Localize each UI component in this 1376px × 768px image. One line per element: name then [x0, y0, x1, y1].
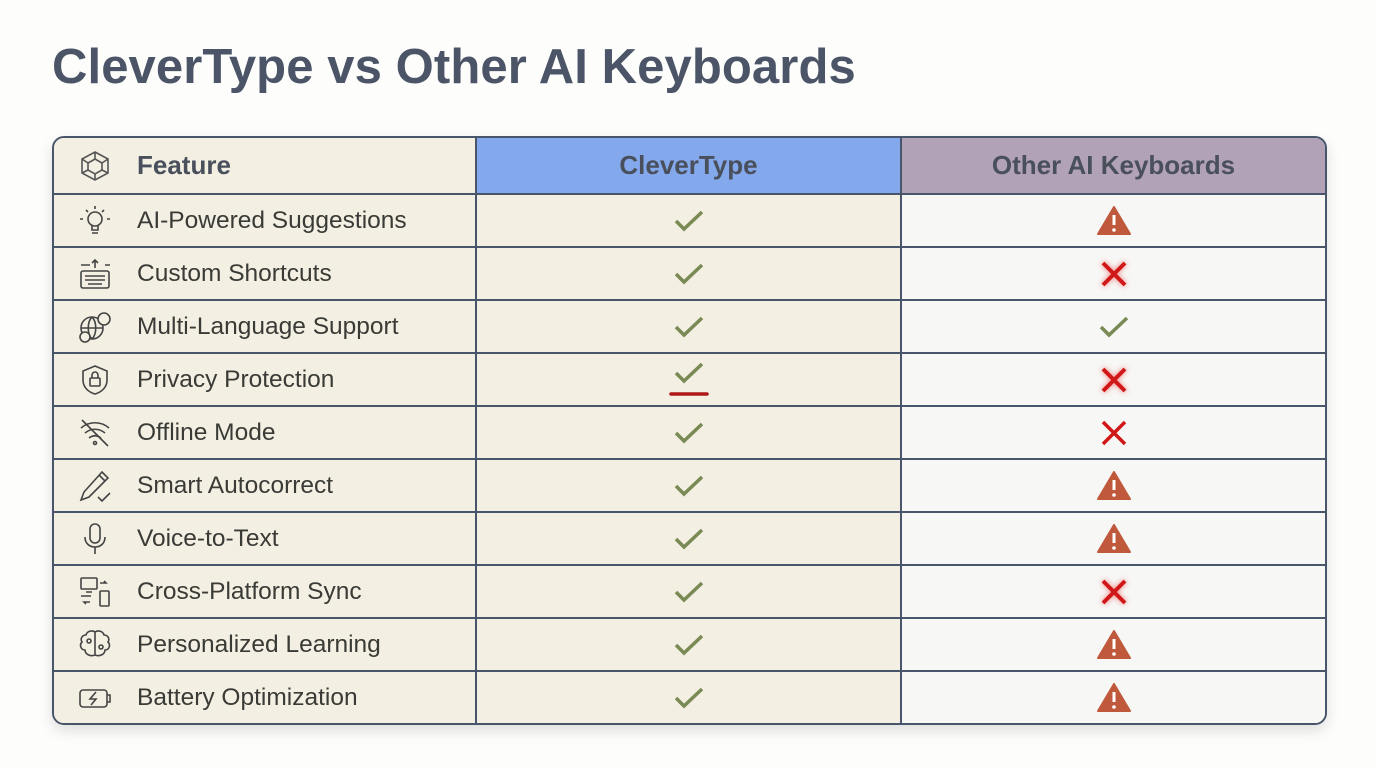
comparison table: Battery Optimization: [137, 684, 358, 710]
comparison table: Multi-Language Support: [137, 312, 399, 340]
comparison table: Voice-to-Text: [137, 524, 279, 552]
header row: Feature: [137, 150, 231, 180]
rows: AI-Powered Suggestions: [137, 206, 407, 234]
comparison table: Custom Shortcuts: [137, 260, 332, 286]
header row: Other AI Keyboards: [992, 150, 1235, 180]
comparison table: [52, 136, 1327, 725]
header row: [54, 138, 1325, 193]
comparison table: Offline Mode: [137, 418, 275, 446]
comparison table: Cross-Platform Sync: [137, 578, 362, 604]
title: CleverType vs Other AI Keyboards: [52, 40, 856, 94]
comparison table: Smart Autocorrect: [137, 472, 333, 498]
header row: CleverType: [619, 150, 758, 180]
rows: [54, 193, 1325, 246]
comparison table: Personalized Learning: [137, 630, 381, 658]
comparison table: Privacy Protection: [137, 366, 334, 392]
